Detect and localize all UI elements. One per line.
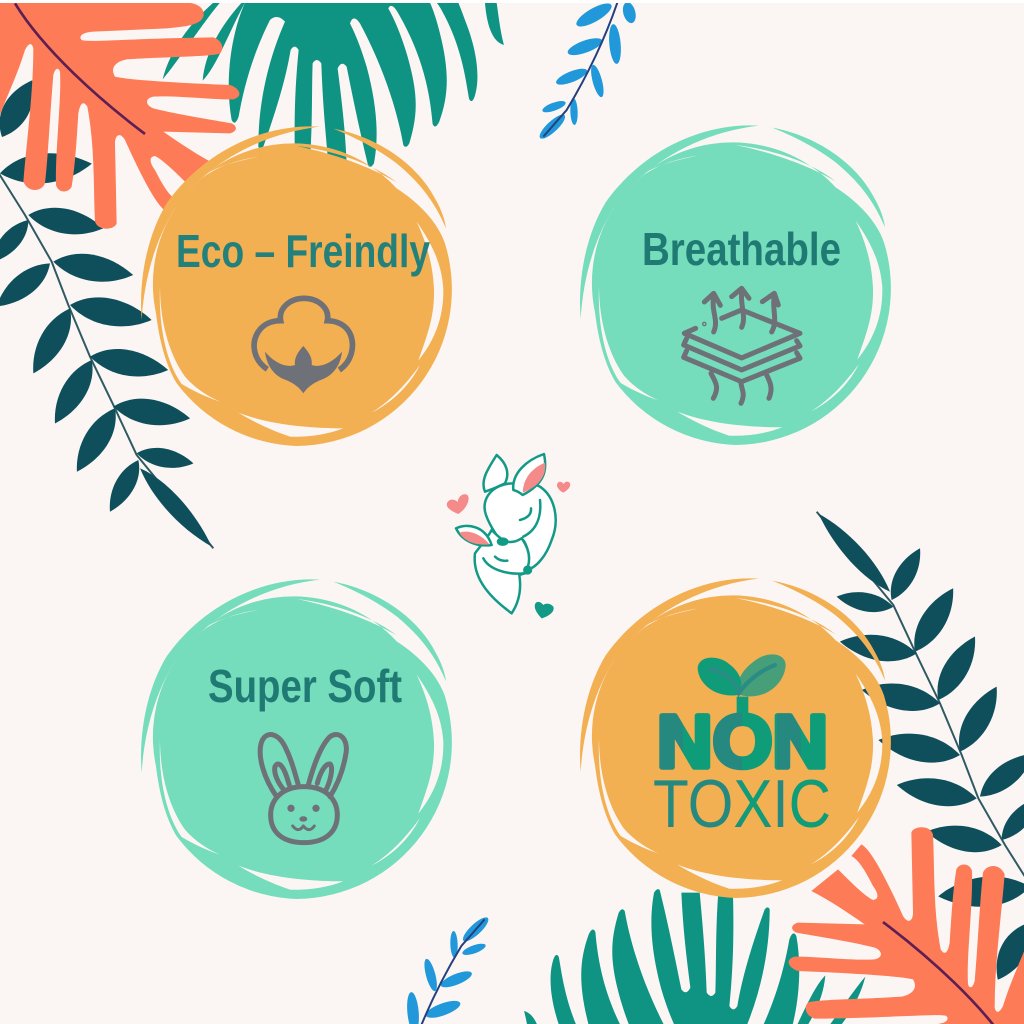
foliage: top-left cluster <box>0 0 638 552</box>
heading: Eco - Freindly: Eco – Freindly <box>176 225 430 277</box>
mint brush circle <box>141 579 452 899</box>
blue twig, top <box>537 0 638 142</box>
mint brush circle <box>580 125 891 445</box>
blue twig, bottom <box>390 914 491 1024</box>
dark fern, top-left <box>0 74 218 552</box>
logo: mother and baby deer with hearts <box>447 454 570 618</box>
orange brush circle <box>580 578 891 898</box>
teal palm leaf, top <box>128 3 504 167</box>
icon: breathable fabric layers <box>684 288 800 403</box>
foliage: bottom-right cluster <box>390 508 1024 1024</box>
word: NON: NON <box>657 700 828 783</box>
icon: seedling <box>698 654 786 718</box>
panel: breathable <box>580 125 891 445</box>
orange brush circle <box>141 126 452 446</box>
panel: eco-friendly <box>141 126 452 446</box>
panel: super soft <box>141 579 452 899</box>
heading: Breathable: Breathable <box>642 223 841 275</box>
teal palm leaf, bottom <box>524 889 900 1024</box>
top edge strip <box>0 0 1024 3</box>
coral leaf, bottom-right <box>789 827 1024 1024</box>
heading: Super Soft: Super Soft <box>208 660 402 712</box>
coral leaf, top-left <box>0 3 239 229</box>
icon: cotton boll <box>254 298 352 393</box>
dark fern, bottom-right <box>812 508 1024 986</box>
word: TOXIC: TOXIC <box>653 766 831 842</box>
icon: rabbit <box>260 735 346 843</box>
panel: non toxic <box>580 578 891 898</box>
